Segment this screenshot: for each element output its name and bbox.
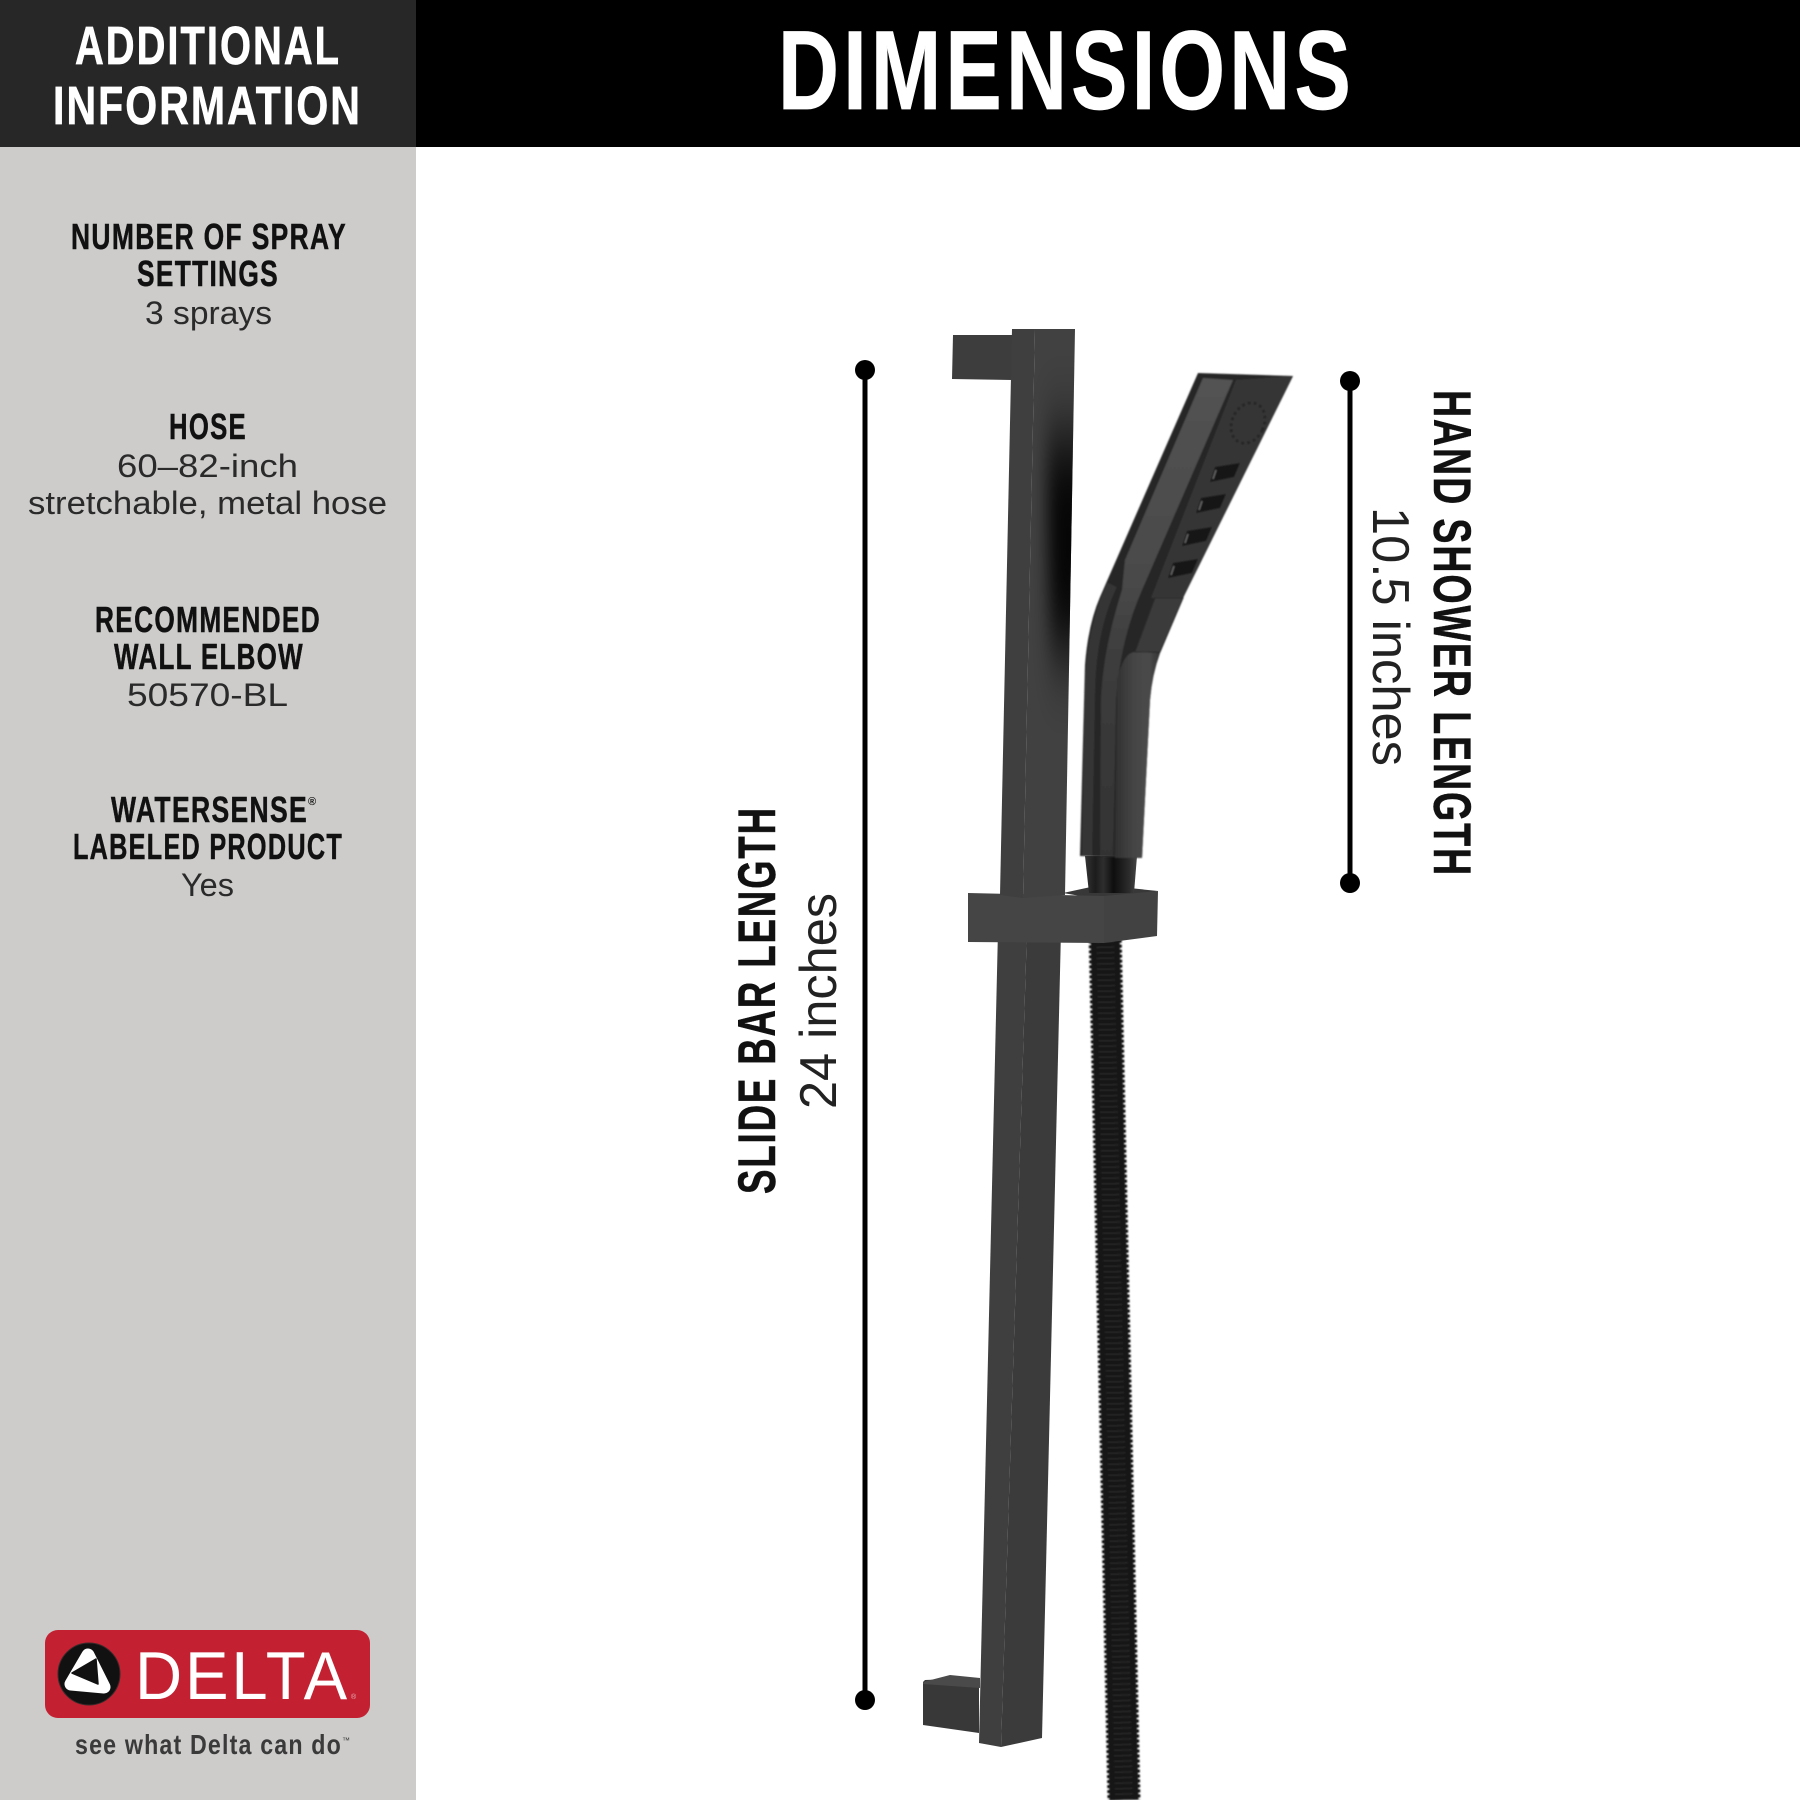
icon: delta emblem	[58, 1643, 120, 1705]
spec: number of spray settings: SETTINGS	[137, 253, 279, 294]
tagline: ™	[342, 1736, 350, 1745]
spec: recommended wall elbow	[95, 599, 321, 713]
product: hose	[1105, 930, 1124, 1800]
spec: watersense labeled product	[73, 789, 343, 903]
spec: number of spray settings: 3 sprays	[145, 295, 272, 331]
label: slide bar length: SLIDE BAR LENGTH	[728, 806, 787, 1194]
dimension line: hand shower	[1340, 371, 1360, 893]
header: additional information	[0, 0, 416, 147]
label: slide bar length: 24 inches	[790, 893, 848, 1109]
handle	[1115, 652, 1160, 858]
spec: hose	[28, 406, 387, 521]
spec: recommended wall elbow: RECOMMENDED	[95, 599, 321, 640]
header: dimensions title: DIMENSIONS	[778, 8, 1355, 133]
face	[1151, 376, 1293, 598]
top bracket	[952, 335, 1013, 380]
clamp front	[968, 891, 1158, 943]
outer strip	[1087, 585, 1112, 856]
header: dimensions title	[416, 0, 1800, 147]
product: slide bar	[923, 329, 1158, 1747]
shower connector	[1085, 856, 1137, 893]
spray logo	[1225, 397, 1271, 449]
lower bar	[979, 930, 1061, 1747]
clamp top face	[1063, 885, 1158, 900]
spec: watersense labeled product: LABELED PRODUCT	[73, 826, 343, 867]
label: hand shower length: HAND SHOWER LENGTH	[1422, 390, 1481, 877]
header: additional information: ADDITIONAL	[75, 16, 341, 76]
spec: number of spray settings	[71, 216, 347, 331]
header: additional information: INFORMATION	[53, 76, 362, 136]
upper bar	[1000, 329, 1075, 896]
spec: number of spray settings: NUMBER OF SPRAY	[71, 216, 347, 257]
label: hand shower length: 10.5 inches	[1361, 507, 1419, 766]
label: hand shower length	[1361, 390, 1481, 877]
spec: recommended wall elbow: WALL ELBOW	[114, 636, 304, 677]
spec: watersense labeled product: Yes	[181, 867, 234, 903]
tagline: see what Delta can do	[75, 1729, 342, 1760]
spec: hose: 60–82-inch	[117, 448, 298, 484]
dimension line: slide bar	[855, 360, 875, 1710]
spray nozzles	[1168, 463, 1240, 578]
product: hand shower	[1080, 373, 1293, 858]
spec: hose: stretchable, metal hose	[28, 485, 387, 521]
logo: delta: ®	[351, 1693, 357, 1701]
side band	[1100, 378, 1233, 856]
grip panel	[1135, 598, 1183, 652]
spec: recommended wall elbow: 50570-BL	[127, 677, 288, 713]
logo: delta	[45, 1630, 370, 1718]
spec: watersense labeled product: ®	[308, 796, 316, 808]
label: slide bar length	[728, 806, 848, 1194]
spec: watersense labeled product: WATERSENSE	[111, 789, 308, 830]
panel: sidebar background	[0, 0, 416, 1800]
logo: delta: DELTA	[135, 1638, 350, 1714]
spec: hose: HOSE	[169, 406, 247, 447]
bottom bracket	[923, 1675, 980, 1733]
